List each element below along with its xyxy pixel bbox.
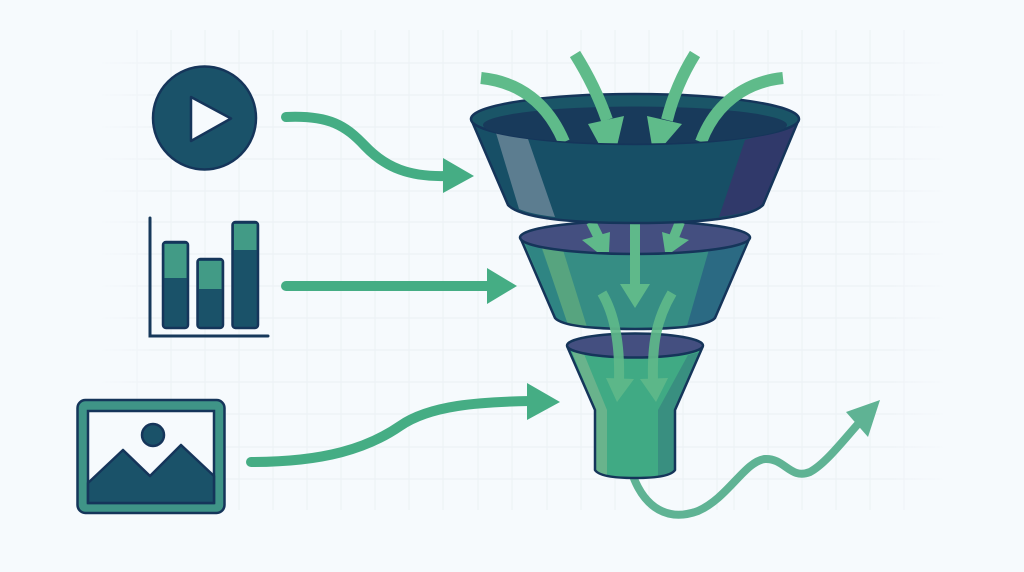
arrow: video to funnel: [286, 117, 474, 193]
arrow: chart to funnel: [286, 268, 517, 304]
funnel tier: middle: [520, 221, 750, 329]
arrows entering top tier: [481, 54, 783, 146]
funnel tier: top: [471, 94, 799, 223]
arrow: image to funnel: [251, 383, 560, 462]
icon: bar chart: [150, 218, 268, 336]
funnel tier: bottom spout: [567, 334, 703, 478]
arrow: growth output line: [633, 400, 880, 515]
icon: play button: [153, 66, 256, 170]
arrows flowing into bottom spout: [602, 293, 672, 402]
arrows inside middle tier: [582, 222, 689, 308]
icon: image picture: [78, 400, 224, 513]
